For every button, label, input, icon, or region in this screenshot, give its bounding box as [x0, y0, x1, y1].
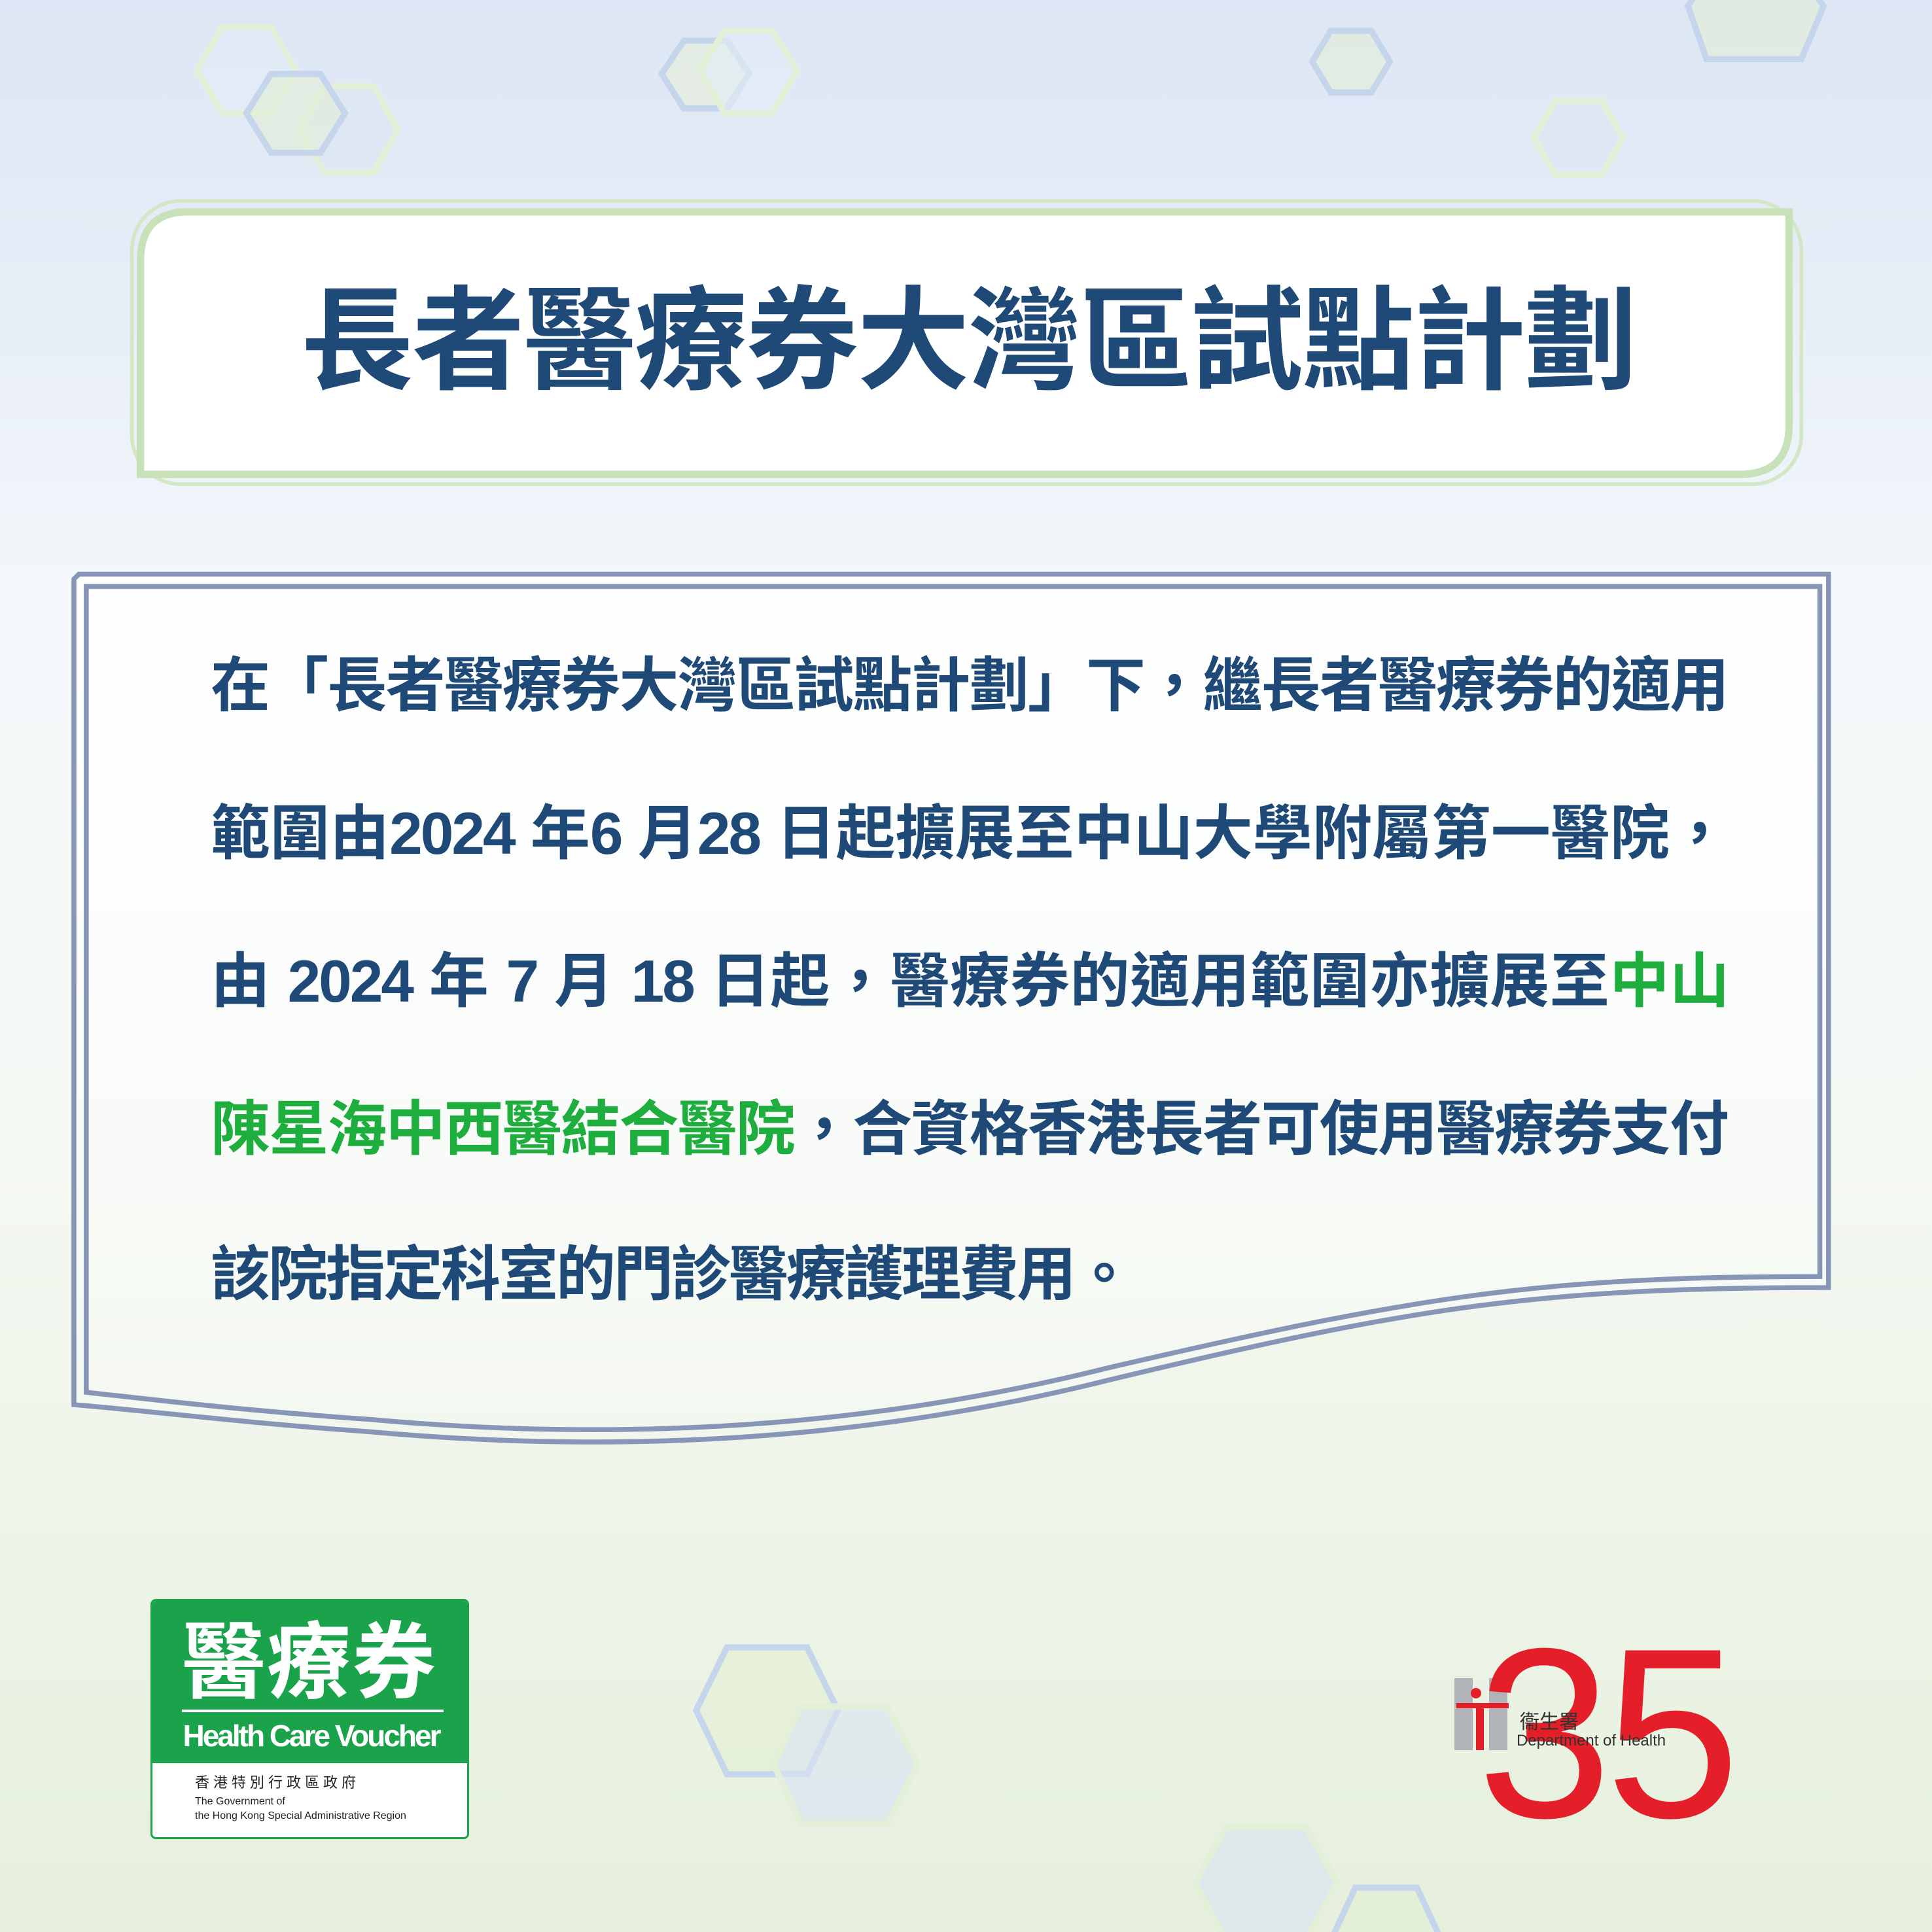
logo: health care voucher: 香港特別行政區政府 [195, 1771, 360, 1792]
logo: department of health 135: Department of Health [1517, 1732, 1666, 1749]
logo: health care voucher: The Government of [195, 1796, 285, 1807]
logo: department of health 135: 35 [1477, 1598, 1734, 1869]
body text: 範圍由2024 年6 月28 日起擴展至中山大學附屬第一醫院， [211, 801, 1727, 867]
logo: health care voucher: Health Care Voucher [183, 1719, 440, 1753]
title box frame [132, 201, 1801, 484]
logo: department of health 135: 衞生署 [1520, 1706, 1579, 1734]
body text: 該院指定科室的門診醫療護理費用。 [211, 1242, 1132, 1308]
body text [211, 653, 1727, 1308]
body text: 陳星海中西醫結合醫院，合資格香港長者可使用醫療券支付 [211, 1097, 1727, 1163]
body text: 在「長者醫療券大灣區試點計劃」下，繼長者醫療券的適用 [211, 653, 1727, 719]
title: 長者醫療券大灣區試點計劃 [301, 279, 1636, 404]
body text: 由 2024 年 7 月 18 日起，醫療券的適用範圍亦擴展至中山 [211, 949, 1727, 1015]
logo: health care voucher [150, 1599, 469, 1839]
logo: health care voucher: the Hong Kong Special Administrative Region [195, 1810, 406, 1821]
